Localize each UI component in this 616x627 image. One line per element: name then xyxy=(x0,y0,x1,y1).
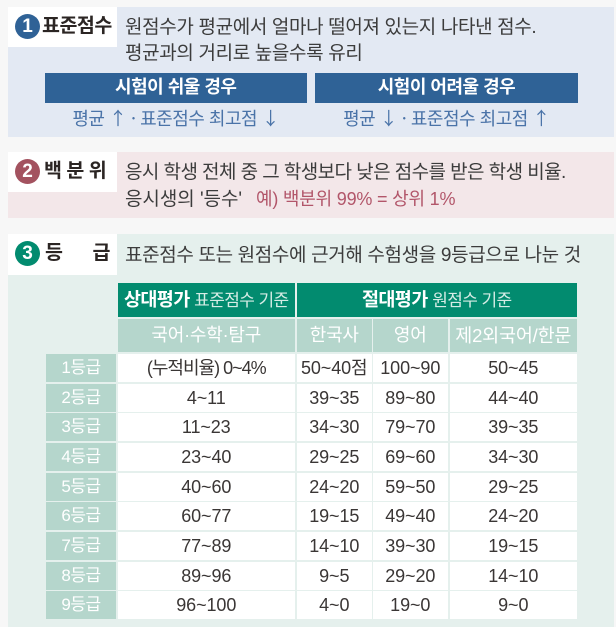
text: standard score description: 원점수가 평균에서 얼마나 떨어져 있는지 나타낸 점수. xyxy=(125,17,536,38)
title: standard score: 표준점수 xyxy=(42,15,112,37)
row: grade 5 xyxy=(46,473,116,501)
text: 11~23 xyxy=(182,417,231,437)
text: 9~5 xyxy=(319,566,349,586)
text: percentile description: 응시생의 '등수' 예) 백분위 99% = 상위 1% xyxy=(125,189,455,210)
header: absolute evaluation xyxy=(296,283,577,317)
row: grade 7 xyxy=(46,532,116,560)
text: 9~0 xyxy=(498,595,528,615)
icon: number 1: 1 xyxy=(22,16,33,37)
row: grade 9 xyxy=(46,591,116,619)
text: 29~20 xyxy=(385,566,435,586)
header: relative evaluation xyxy=(118,283,294,317)
heading: grade xyxy=(8,234,117,275)
text: 24~20 xyxy=(488,506,538,526)
row: grade 3 xyxy=(46,413,116,441)
subheader: Korean, math, inquiry xyxy=(118,319,294,352)
text: standard score description xyxy=(125,17,536,64)
text: 19~0 xyxy=(390,595,430,615)
heading: standard score xyxy=(8,7,117,47)
text: 34~30 xyxy=(488,447,538,467)
row: grade 3: 3등급 xyxy=(61,417,101,436)
header: relative evaluation: 상대평가 표준점수 기준 xyxy=(124,289,289,310)
row: grade 2: 2등급 xyxy=(61,388,101,407)
text: percentile description xyxy=(125,162,566,210)
row: grade 4 xyxy=(46,443,116,471)
row: grade 6 xyxy=(46,502,116,530)
text: 14~10 xyxy=(488,566,538,586)
row: grade 2 xyxy=(46,384,116,412)
text: 89~96 xyxy=(181,566,231,586)
text: 29~25 xyxy=(488,477,538,497)
row: grade 9: 9등급 xyxy=(61,595,101,614)
text: 44~40 xyxy=(488,388,538,408)
text: 23~40 xyxy=(181,447,231,467)
text: 60~77 xyxy=(181,506,231,526)
subheader: Korean, math, inquiry: 국어·수학·탐구 xyxy=(151,325,261,345)
text: percentile description: 응시 학생 전체 중 그 학생보다 낮은 점수를 받은 학생 비율. xyxy=(125,162,566,183)
panel: standard score xyxy=(8,7,614,137)
text: 50~45 xyxy=(488,358,538,378)
icon: number 3: 3 xyxy=(22,243,33,264)
text: 19~15 xyxy=(488,536,538,556)
text: 69~60 xyxy=(385,447,435,467)
subheader: Korean history: 한국사 xyxy=(310,325,359,345)
header: absolute evaluation: 절대평가 원점수 기준 xyxy=(362,289,512,310)
text: 89~80 xyxy=(385,388,435,408)
row: grade 7: 7등급 xyxy=(61,536,101,555)
title: grade xyxy=(45,242,110,264)
text: 4~11 xyxy=(187,388,226,408)
text: 100~90 xyxy=(380,358,440,378)
subheader: English xyxy=(373,319,448,352)
table: grade cutoffs xyxy=(46,283,577,619)
text: grade description: 표준점수 또는 원점수에 근거해 수험생을 9등급으로 나눈 것 xyxy=(125,245,581,266)
row: grade 6: 6등급 xyxy=(61,506,101,525)
text: 39~35 xyxy=(488,417,538,437)
row: grade 4: 4등급 xyxy=(61,447,101,466)
row: grade 5: 5등급 xyxy=(61,477,101,496)
row: grade 8: 8등급 xyxy=(61,566,101,585)
text: 24~20 xyxy=(309,477,359,497)
text: easy exam effect: 평균 ↑ · 표준점수 최고점 ↓ xyxy=(72,105,279,131)
text: 34~30 xyxy=(309,417,359,437)
subheader: second foreign language: 제2외국어/한문 xyxy=(455,325,571,346)
panel: percentile xyxy=(8,152,614,218)
row: grade 8 xyxy=(46,562,116,590)
text: 29~25 xyxy=(309,447,359,467)
heading: percentile xyxy=(8,152,117,192)
row: grade 1: 1등급 xyxy=(61,358,101,377)
text: (누적비율) 0~4% xyxy=(147,358,266,378)
text: 50~40점 xyxy=(301,358,368,378)
text: 39~35 xyxy=(309,388,359,408)
text: 96~100 xyxy=(176,595,236,615)
icon: number 2 xyxy=(15,159,40,184)
text: 79~70 xyxy=(385,417,435,437)
text: 39~30 xyxy=(385,536,435,556)
text: 19~15 xyxy=(309,506,359,526)
text: 59~50 xyxy=(385,477,435,497)
icon: number 1 xyxy=(15,14,40,39)
title: grade: 등 xyxy=(45,242,62,264)
subheader: English: 영어 xyxy=(394,325,427,345)
subheader: Korean history xyxy=(296,319,372,352)
bar: easy exam xyxy=(44,73,307,103)
text: hard exam effect: 평균 ↓ · 표준점수 최고점 ↑ xyxy=(343,105,550,131)
row: grade 1 xyxy=(46,354,116,382)
bar: hard exam xyxy=(315,73,578,103)
panel: grade xyxy=(8,234,614,627)
text: 14~10 xyxy=(309,536,359,556)
text: 4~0 xyxy=(319,595,349,615)
bar: easy exam: 시험이 쉬울 경우 xyxy=(115,77,236,97)
title: grade: 급 xyxy=(93,242,110,264)
text: standard score description: 평균과의 거리로 높을수록 유리 xyxy=(125,43,362,64)
icon: number 2: 2 xyxy=(22,161,33,182)
subheader: second foreign language xyxy=(450,319,577,352)
text: 49~40 xyxy=(385,506,435,526)
text: 40~60 xyxy=(181,477,231,497)
bar: hard exam: 시험이 어려울 경우 xyxy=(378,77,515,97)
title: percentile: 백 분 위 xyxy=(44,160,107,182)
icon: number 3 xyxy=(15,241,40,266)
text: 77~89 xyxy=(181,536,231,556)
